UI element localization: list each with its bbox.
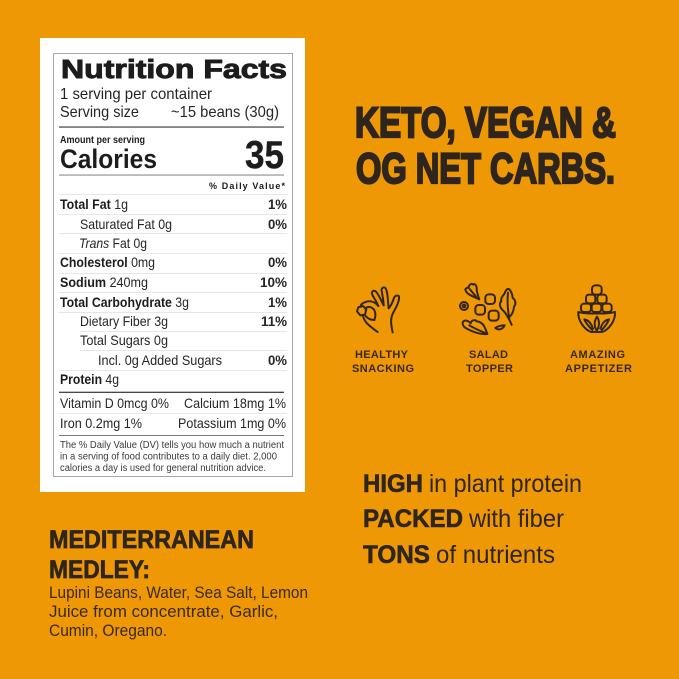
text: daily value header: % Daily Value* — [209, 181, 285, 191]
benefits list: TONS — [363, 541, 430, 569]
nutrient rows: 0% — [268, 352, 288, 368]
nutrient rows: Trans Fat 0g — [79, 235, 147, 251]
nutrient rows: 1% — [268, 196, 288, 212]
heading: keto vegan 0g net carbs — [355, 99, 616, 193]
vitamins and minerals: Vitamin D 0mcg 0% — [60, 395, 169, 411]
nutrient rows: 1% — [268, 294, 288, 310]
benefits list — [363, 470, 582, 569]
label: salad topper: SALAD — [469, 349, 508, 361]
footnote — [60, 440, 284, 474]
nutrient rows: Total Sugars 0g — [80, 332, 168, 348]
panel: nutrition label — [40, 38, 305, 492]
vitamins and minerals: Iron 0.2mg 1% — [60, 415, 142, 431]
label: salad topper — [466, 349, 513, 375]
nutrient rows: 11% — [261, 313, 288, 329]
heading: mediterranean medley: MEDITERRANEAN — [49, 526, 254, 554]
nutrient rows: Cholesterol 0mg — [60, 254, 155, 270]
footnote: in a serving of food contributes to a daily diet. 2,000 — [60, 452, 277, 462]
text: calories: Calories — [60, 144, 157, 174]
label: salad topper: TOPPER — [466, 363, 513, 375]
nutrient rows: 0% — [268, 254, 288, 270]
nutrient rows: Total Carbohydrate 3g — [60, 294, 189, 310]
heading: Nutrition Facts: Nutrition Facts — [61, 56, 287, 84]
text: amount per serving: Amount per serving — [60, 135, 145, 146]
text: ingredients: Juice from concentrate, Garlic, — [49, 602, 278, 621]
nutrient rows: Dietary Fiber 3g — [80, 313, 168, 329]
label: amazing appetizer — [565, 349, 632, 375]
heading: mediterranean medley — [49, 526, 254, 584]
nutrient rows: Total Fat 1g — [60, 196, 128, 212]
text: serving size: ~15 beans (30g) — [171, 104, 279, 121]
label: healthy snacking — [352, 349, 414, 375]
footnote: The % Daily Value (DV) tells you how much a nutrient — [60, 440, 284, 451]
text: serving size: Serving size — [60, 104, 139, 121]
benefits list: with fiber — [468, 505, 564, 533]
icon: salad ingredients — [460, 284, 515, 334]
benefits list: PACKED — [363, 505, 463, 533]
nutrient rows: Saturated Fat 0g — [80, 216, 172, 232]
nutrient rows: Incl. 0g Added Sugars — [98, 352, 222, 368]
benefits list: of nutrients — [436, 541, 555, 569]
nutrient rows: Protein 4g — [60, 371, 119, 387]
nutrient rows — [60, 196, 288, 387]
text: servings per container: 1 serving per container — [60, 86, 213, 103]
vitamins and minerals: Calcium 18mg 1% — [184, 395, 286, 411]
text: serving size — [60, 104, 279, 121]
icon: ok hand — [357, 287, 399, 332]
benefits list: in plant protein — [429, 470, 582, 498]
benefits list: HIGH — [363, 470, 423, 498]
text: ingredients: Cumin, Oregano. — [49, 621, 167, 640]
icon: bowl of beans — [578, 285, 615, 332]
vitamins and minerals: Potassium 1mg 0% — [178, 415, 286, 431]
nutrient rows: Sodium 240mg — [60, 274, 148, 290]
nutrient rows: 0% — [268, 216, 288, 232]
number: calories 35: 35 — [245, 134, 284, 177]
text: ingredients: Lupini Beans, Water, Sea Salt, Lemon — [49, 583, 308, 602]
text: ingredients — [49, 583, 308, 640]
vitamins and minerals — [60, 395, 286, 431]
label: healthy snacking: HEALTHY — [355, 349, 409, 361]
label: amazing appetizer: APPETIZER — [565, 363, 632, 375]
label: healthy snacking: SNACKING — [352, 363, 414, 375]
nutrient rows: 10% — [260, 274, 288, 290]
footnote: calories a day is used for general nutrition advice. — [60, 463, 266, 474]
heading: mediterranean medley: MEDLEY: — [49, 556, 150, 584]
label: amazing appetizer: AMAZING — [570, 349, 625, 361]
